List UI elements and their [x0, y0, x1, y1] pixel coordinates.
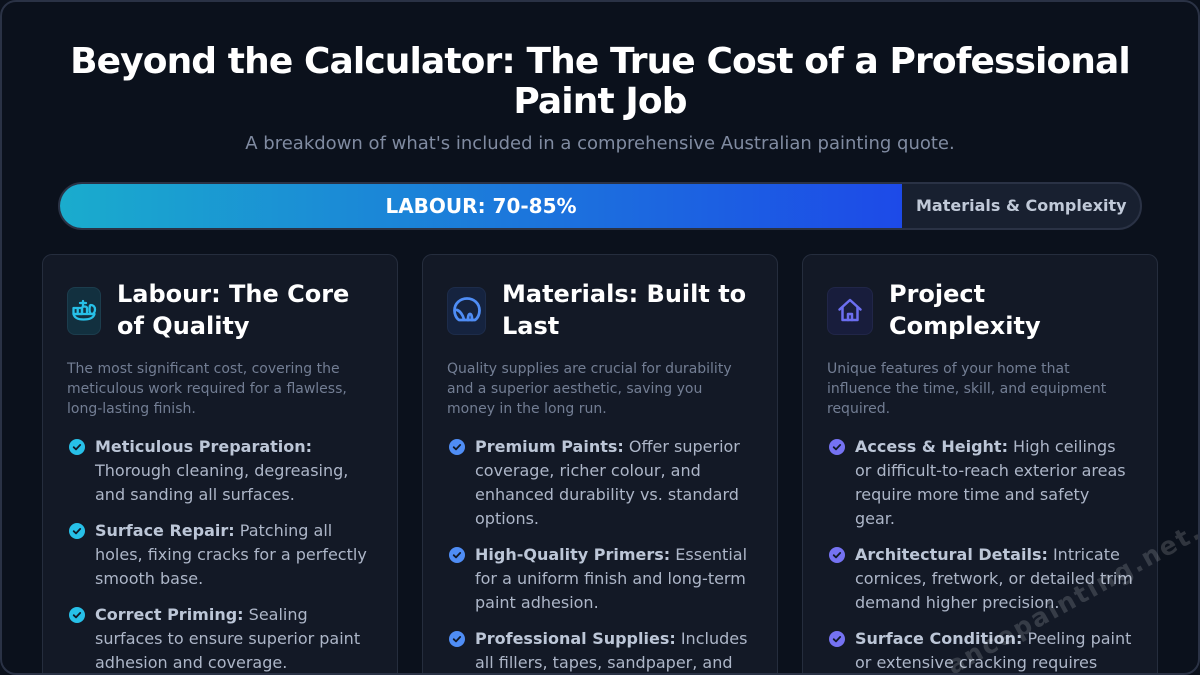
- list item: surface condition: or extensive cracking requires: [855, 653, 1097, 672]
- list item: premium paints: coverage, richer colour, and: [475, 461, 701, 480]
- list item: surface repair: holes, fixing cracks for a perfectly: [95, 545, 367, 564]
- list item: professional supplies: [449, 629, 747, 672]
- list item: surface repair: [69, 521, 367, 588]
- list item: architectural details: Architectural Details: Intricate: [855, 545, 1120, 564]
- description: [827, 361, 1106, 417]
- description: required.: [827, 401, 890, 417]
- description: money in the long run.: [447, 401, 607, 417]
- list item: access and height: [829, 437, 1126, 528]
- heading: Materials: Built to: [502, 280, 746, 308]
- description: [447, 361, 732, 417]
- description: [67, 361, 347, 417]
- heading: Labour: The Core: [117, 280, 349, 308]
- icon: materials: [447, 287, 486, 335]
- heading: [117, 280, 349, 340]
- labour segment: LABOUR: 70-85%: [385, 194, 577, 218]
- list item: meticulous preparation: and sanding all surfaces.: [95, 485, 295, 504]
- materials and complexity segment: Materials & Complexity: [916, 196, 1127, 215]
- list item: surface repair: Surface Repair: Patching all: [95, 521, 332, 540]
- list item: architectural details: [829, 545, 1133, 612]
- heading: Project: [889, 280, 985, 308]
- heading: [889, 280, 1041, 340]
- list item: access and height: require more time and safety: [855, 485, 1089, 504]
- list item: professional supplies: all fillers, tapes, sandpaper, and: [475, 653, 733, 672]
- list item: high-quality primers: for a uniform finish and long-term: [475, 569, 746, 588]
- list item: premium paints: options.: [475, 509, 539, 528]
- labour segment: [60, 184, 902, 228]
- title: Beyond the Calculator: The True Cost of a Professional: [70, 41, 1130, 82]
- list item: meticulous preparation: Meticulous Preparation:: [95, 437, 312, 456]
- heading: of Quality: [117, 312, 250, 340]
- list item: premium paints: [449, 437, 740, 528]
- list item: access and height: or difficult-to-reach exterior areas: [855, 461, 1126, 480]
- icon: labour: [67, 287, 101, 335]
- list item: meticulous preparation: Thorough cleaning, degreasing,: [95, 461, 348, 480]
- heading: Last: [502, 312, 559, 340]
- list item: premium paints: Premium Paints: Offer superior: [475, 437, 740, 456]
- description: long-lasting finish.: [67, 401, 196, 417]
- list item: meticulous preparation: [69, 437, 348, 504]
- list item: correct priming: [69, 605, 360, 672]
- list item: professional supplies: Professional Supplies: Includes: [475, 629, 747, 648]
- title: Paint Job: [513, 81, 687, 122]
- description: The most significant cost, covering the: [67, 361, 340, 377]
- description: Quality supplies are crucial for durability: [447, 361, 732, 377]
- list item: high-quality primers: paint adhesion.: [475, 593, 599, 612]
- list item: correct priming: adhesion and coverage.: [95, 653, 287, 672]
- list item: architectural details: cornices, fretwork, or detailed trim: [855, 569, 1133, 588]
- panel: labour: [42, 254, 398, 675]
- list item: high-quality primers: High-Quality Primers: Essential: [475, 545, 747, 564]
- list item: correct priming: Correct Priming: Sealing: [95, 605, 308, 624]
- description: influence the time, skill, and equipment: [827, 381, 1106, 397]
- list item: access and height: Access & Height: High ceilings: [855, 437, 1116, 456]
- heading: Complexity: [889, 312, 1041, 340]
- subtitle: A breakdown of what's included in a comprehensive Australian painting quote.: [245, 133, 955, 154]
- list item: surface repair: smooth base.: [95, 569, 203, 588]
- panel: project complexity: [802, 254, 1158, 675]
- icon: house: [827, 287, 873, 335]
- description: and a superior aesthetic, saving you: [447, 381, 702, 397]
- title: [70, 41, 1130, 122]
- list item: surface condition: [829, 629, 1131, 672]
- list item: access and height: gear.: [855, 509, 895, 528]
- list item: premium paints: enhanced durability vs. standard: [475, 485, 739, 504]
- list item: architectural details: demand higher precision.: [855, 593, 1059, 612]
- cost split bar: [58, 182, 1142, 230]
- description: Unique features of your home that: [827, 361, 1070, 377]
- list item: surface condition: Surface Condition: Peeling paint: [855, 629, 1131, 648]
- panel: materials: [422, 254, 778, 675]
- list item: high-quality primers: [449, 545, 747, 612]
- description: meticulous work required for a flawless,: [67, 381, 347, 397]
- heading: [502, 280, 746, 340]
- list item: correct priming: surfaces to ensure superior paint: [95, 629, 360, 648]
